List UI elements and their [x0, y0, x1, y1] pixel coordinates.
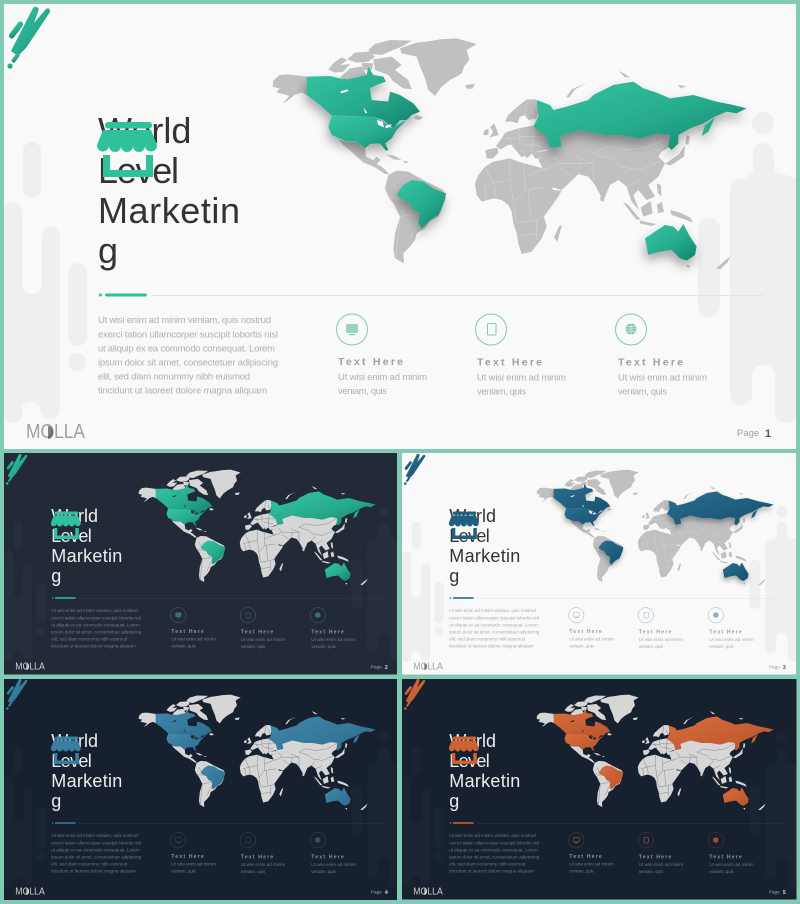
logo: MOLLA — [15, 886, 45, 898]
title: Level — [98, 150, 179, 191]
world map — [139, 695, 376, 810]
text block: intro paragraph — [51, 608, 142, 649]
feature 3: Ut wisi enim ad minim — [618, 372, 707, 384]
feature 3: Text Here — [311, 854, 344, 860]
panel: slide 2 dark green — [4, 453, 400, 674]
world map — [139, 470, 376, 585]
panel: slide 1 large light — [4, 4, 796, 449]
icon: leaf logo mark — [7, 7, 50, 69]
feature 3: Ut wisi enim ad minim — [311, 637, 356, 643]
divider with accent bar — [52, 822, 384, 824]
text block: intro paragraph — [98, 315, 278, 396]
logo: MOLLA — [413, 886, 443, 898]
title: g — [449, 566, 459, 586]
background pill decoration — [4, 112, 796, 423]
text block: intro paragraph: Ut wisi enim ad minim veniam, quis nostrud — [98, 315, 271, 326]
page number — [371, 890, 389, 896]
feature 1 — [171, 608, 216, 650]
feature 2: Ut wisi enim ad minim — [639, 862, 683, 868]
page number — [769, 890, 786, 896]
icon: store — [51, 512, 81, 539]
feature 2: Ut wisi enim ad minim — [241, 637, 285, 643]
icon: globe — [626, 324, 636, 334]
page number: Page — [769, 890, 780, 896]
text block: intro paragraph: exerci tation ullamcorper suscipit lobortis nisl — [51, 840, 141, 846]
text block: intro paragraph — [51, 833, 142, 874]
background pill decoration — [4, 506, 400, 662]
feature 2 — [240, 608, 285, 650]
feature 3: Text Here — [709, 854, 742, 860]
feature 3: veniam, quis — [709, 644, 734, 650]
feature 1: Text Here — [171, 629, 204, 635]
text block: intro paragraph: exerci tation ullamcorper suscipit lobortis nisl — [51, 615, 141, 621]
feature 1: Ut wisi enim ad minim — [569, 636, 614, 642]
title: Marketin — [449, 546, 520, 566]
background pill decoration — [4, 732, 400, 887]
text block: intro paragraph: Ut wisi enim ad minim veniam, quis nostrud — [51, 608, 138, 614]
feature 2 — [638, 832, 683, 875]
text block: intro paragraph — [449, 608, 540, 649]
feature 3: veniam, quis — [709, 869, 734, 875]
text block: intro paragraph: ipsum dolor sit amet, consectetuer adipiscing — [51, 854, 142, 860]
icon: monitor — [175, 612, 181, 618]
feature 3: veniam, quis — [311, 869, 336, 875]
feature 2 — [240, 832, 285, 875]
title: g — [449, 791, 459, 811]
page number — [769, 665, 786, 670]
world map — [537, 470, 774, 585]
feature 1: veniam, quis — [338, 386, 387, 397]
feature 1: Text Here — [569, 629, 602, 635]
page number: Page — [371, 890, 382, 896]
page number: 5 — [783, 890, 786, 896]
feature 3: Text Here — [709, 629, 742, 635]
icon: store — [449, 512, 479, 539]
feature 1: Ut wisi enim ad minim — [171, 636, 216, 642]
icon: globe — [713, 837, 719, 843]
page number: 4 — [385, 890, 389, 896]
title: Marketin — [51, 771, 122, 791]
text block: intro paragraph: elit, sed diam nonummy nibh euismod — [98, 372, 250, 382]
title — [51, 731, 122, 811]
logo: MOLLA — [413, 662, 443, 672]
feature 3 — [708, 608, 754, 650]
title: Level — [449, 526, 490, 546]
icon: monitor — [346, 324, 358, 335]
text block: intro paragraph: tincidunt ut laoreet dolore magna aliquam — [449, 868, 534, 874]
feature 2: Ut wisi enim ad minim — [639, 637, 683, 643]
title: Marketin — [98, 190, 240, 231]
text block: intro paragraph: ipsum dolor sit amet, consectetuer adipiscing — [98, 358, 278, 368]
feature 2: veniam, quis — [639, 644, 664, 650]
text block: intro paragraph: tincidunt ut laoreet dolore magna aliquam — [449, 643, 534, 649]
feature 3 — [310, 832, 356, 875]
feature 1 — [569, 832, 614, 874]
text block: intro paragraph: tincidunt ut laoreet dolore magna aliquam — [51, 643, 136, 649]
title: g — [51, 566, 61, 586]
page number — [737, 428, 771, 440]
feature 3: Ut wisi enim ad minim — [311, 862, 356, 868]
feature 3 — [708, 832, 754, 875]
text block: intro paragraph: ut aliquip ex ea commodo consequat. Lorem — [51, 847, 140, 853]
divider with accent bar — [99, 294, 763, 296]
icon: monitor — [573, 612, 579, 618]
background pill decoration — [402, 732, 798, 887]
icon: globe — [713, 612, 719, 618]
icon: store — [97, 122, 157, 177]
feature 1: Ut wisi enim ad minim — [338, 372, 427, 383]
icon: tablet — [246, 837, 250, 843]
text block: intro paragraph: Ut wisi enim ad minim veniam, quis nostrud — [51, 833, 138, 839]
feature 2: veniam, quis — [639, 869, 664, 875]
text block: intro paragraph: tincidunt ut laoreet dolore magna aliquam — [98, 386, 267, 396]
feature 1: veniam, quis — [171, 868, 196, 874]
feature 1: Text Here — [171, 854, 204, 860]
logo: MOLLA — [15, 662, 45, 672]
title: World — [51, 731, 98, 751]
title: World — [449, 731, 496, 751]
icon: store — [449, 736, 479, 764]
feature 2 — [476, 314, 566, 398]
title: Level — [449, 751, 490, 771]
feature 1 — [569, 608, 614, 650]
logo — [414, 662, 443, 670]
feature 1: Ut wisi enim ad minim — [171, 862, 216, 868]
title — [449, 731, 520, 811]
text block: intro paragraph: ut aliquip ex ea commodo consequat. Lorem — [449, 622, 538, 628]
feature 1: Text Here — [338, 356, 403, 368]
page number: 3 — [783, 665, 786, 671]
feature 1: veniam, quis — [569, 644, 594, 650]
text block: intro paragraph: exerci tation ullamcorper suscipit lobortis nisl — [98, 330, 278, 340]
page number: Page — [371, 664, 382, 670]
feature 2: veniam, quis — [241, 869, 266, 875]
icon: globe — [315, 612, 321, 618]
text block: intro paragraph: ipsum dolor sit amet, consectetuer adipiscing — [449, 854, 540, 860]
title: World — [98, 110, 191, 151]
text block: intro paragraph: exerci tation ullamcorper suscipit lobortis nisl — [449, 615, 539, 621]
icon: tablet — [246, 612, 250, 618]
feature 3: Ut wisi enim ad minim — [709, 862, 754, 868]
text block: intro paragraph: Ut wisi enim ad minim veniam, quis nostrud — [449, 833, 536, 839]
page number: Page — [737, 428, 759, 439]
feature 1: veniam, quis — [171, 644, 196, 650]
title: g — [98, 230, 118, 271]
panel: slide 5 dark orange — [402, 679, 798, 900]
feature 2: Ut wisi enim ad minim — [477, 372, 566, 384]
panel: slide 4 dark blue — [4, 679, 400, 900]
icon: leaf logo mark — [404, 454, 425, 485]
logo — [16, 662, 45, 670]
text block: intro paragraph: Ut wisi enim ad minim veniam, quis nostrud — [449, 608, 536, 614]
page number — [371, 665, 388, 670]
title: Level — [51, 751, 92, 771]
icon: globe — [315, 837, 321, 843]
text block: intro paragraph: ut aliquip ex ea commodo consequat. Lorem — [98, 344, 275, 354]
title — [98, 110, 240, 271]
icon: monitor — [573, 838, 579, 843]
icon: leaf logo mark — [404, 679, 425, 710]
title: World — [449, 506, 496, 526]
text block: intro paragraph: elit, sed diam nonummy nibh euismod — [449, 636, 526, 642]
feature 2: Text Here — [639, 629, 671, 635]
title: Marketin — [51, 546, 122, 566]
text block: intro paragraph: ipsum dolor sit amet, consectetuer adipiscing — [51, 629, 142, 635]
feature 3: Text Here — [311, 629, 344, 635]
title — [51, 506, 122, 586]
icon: leaf logo mark — [6, 454, 27, 485]
feature 1 — [171, 832, 216, 874]
feature 1: Ut wisi enim ad minim — [569, 862, 614, 868]
title: g — [51, 791, 61, 811]
title — [449, 506, 520, 586]
feature 1: Text Here — [569, 854, 602, 860]
text block: intro paragraph: ut aliquip ex ea commodo consequat. Lorem — [51, 622, 140, 628]
icon: leaf logo mark — [6, 679, 27, 710]
page number: 1 — [765, 428, 771, 440]
icon: monitor — [175, 838, 181, 843]
title: World — [51, 506, 98, 526]
text block: intro paragraph: elit, sed diam nonummy nibh euismod — [51, 636, 128, 642]
text block: intro paragraph: tincidunt ut laoreet dolore magna aliquam — [51, 868, 136, 874]
feature 3: veniam, quis — [618, 386, 667, 398]
divider with accent bar — [52, 597, 384, 599]
icon: tablet — [644, 837, 648, 843]
title: Level — [51, 526, 92, 546]
text block: intro paragraph: ut aliquip ex ea commodo consequat. Lorem — [449, 847, 538, 853]
feature 3: Text Here — [618, 356, 683, 368]
page number: Page — [769, 664, 780, 670]
text block: intro paragraph — [449, 833, 540, 874]
feature 2: Text Here — [477, 356, 542, 368]
feature 2: Text Here — [639, 854, 671, 860]
icon: store — [51, 736, 81, 764]
feature 2: veniam, quis — [241, 644, 266, 650]
divider with accent bar — [450, 822, 782, 824]
feature 3 — [310, 608, 356, 650]
icon: tablet — [644, 612, 648, 618]
panel: slide 3 light navy — [402, 453, 798, 674]
feature 2: veniam, quis — [477, 386, 526, 398]
feature 2: Ut wisi enim ad minim — [241, 862, 285, 868]
feature 3: Ut wisi enim ad minim — [709, 637, 754, 643]
title: Marketin — [449, 771, 520, 791]
icon: tablet — [488, 324, 496, 335]
background pill decoration — [402, 506, 798, 662]
text block: intro paragraph: elit, sed diam nonummy nibh euismod — [51, 861, 128, 867]
text block: intro paragraph: exerci tation ullamcorper suscipit lobortis nisl — [449, 840, 539, 846]
page number: 2 — [385, 665, 388, 671]
feature 2 — [638, 608, 683, 650]
text block: intro paragraph: ipsum dolor sit amet, consectetuer adipiscing — [449, 629, 540, 635]
feature 1: veniam, quis — [569, 868, 594, 874]
feature 2: Text Here — [241, 629, 273, 635]
feature 2: Text Here — [241, 854, 273, 860]
world map — [537, 695, 774, 810]
world map — [273, 38, 747, 269]
feature 3 — [616, 314, 707, 398]
feature 1 — [336, 314, 427, 397]
text block: intro paragraph: elit, sed diam nonummy nibh euismod — [449, 861, 526, 867]
logo: MOLLA — [26, 421, 86, 443]
divider with accent bar — [450, 597, 782, 599]
feature 3: veniam, quis — [311, 644, 336, 650]
